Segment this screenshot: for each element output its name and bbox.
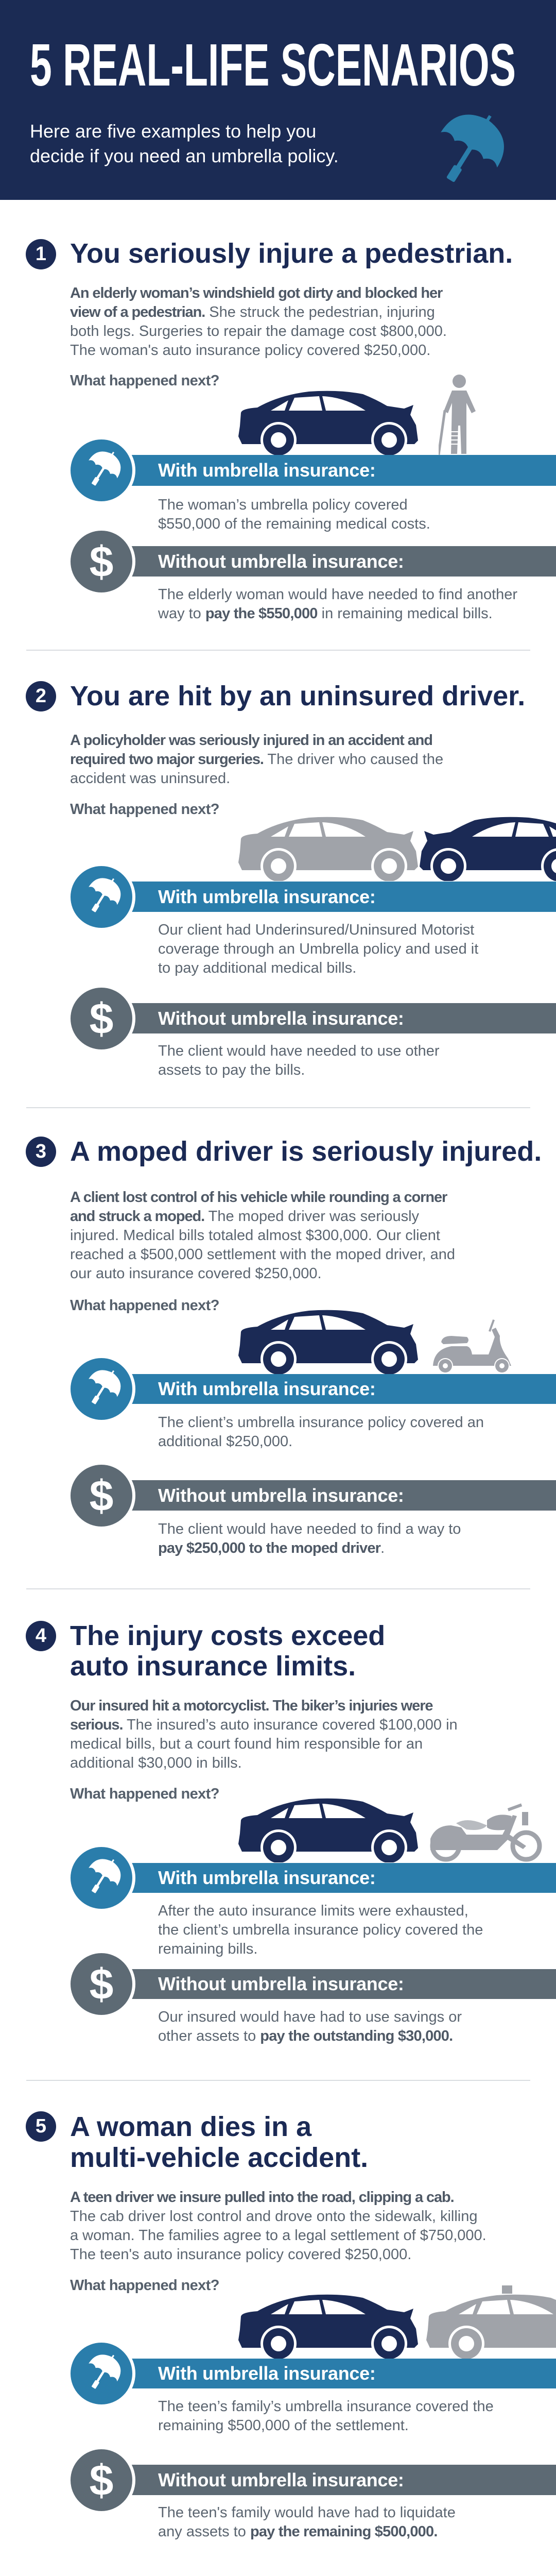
- with umbrella 2: [71, 866, 556, 928]
- without umbrella 5: [71, 2449, 556, 2511]
- with umbrella 4: [71, 1847, 556, 1909]
- what happened 2: What happened next?: [70, 801, 219, 818]
- icon: dollar: [67, 2446, 135, 2514]
- with umbrella 4: With umbrella insurance:: [158, 1867, 376, 1888]
- icon: dollar: [67, 1462, 135, 1530]
- heading 4: The injury costs exceed: [70, 1620, 385, 1651]
- body 5: [70, 2189, 486, 2263]
- number 3: [26, 1137, 56, 1167]
- without umbrella 3: [71, 1465, 556, 1527]
- number 5: 5: [36, 2115, 46, 2137]
- without umbrella 4: Without umbrella insurance:: [158, 1973, 404, 1994]
- body 4: additional $30,000 in bills.: [70, 1755, 242, 1771]
- icon: taxi: [426, 2285, 556, 2359]
- icon: scooter: [433, 1319, 511, 1372]
- answer without 1: [158, 586, 517, 622]
- heading 1: You seriously injure a pedestrian.: [70, 238, 513, 269]
- subtitle: decide if you need an umbrella policy.: [30, 145, 339, 166]
- without umbrella 5: Without umbrella insurance:: [158, 2469, 404, 2490]
- heading 5: multi-vehicle accident.: [70, 2142, 368, 2173]
- icon: navy car 2: [420, 817, 556, 881]
- body 4: medical bills, but a court found him responsible for an: [70, 1736, 423, 1752]
- with umbrella 5: [71, 2343, 556, 2404]
- answer with 2: to pay additional medical bills.: [158, 960, 356, 976]
- number 4: 4: [36, 1625, 46, 1647]
- answer without 5: any assets to pay the remaining $500,000.: [158, 2523, 438, 2540]
- heading 4: [70, 1620, 385, 1682]
- icon: car 3: [238, 1310, 418, 1374]
- body 4: Our insured hit a motorcyclist. The biker’s injuries were: [70, 1698, 432, 1714]
- answer without 3: The client would have needed to find a way to: [158, 1521, 461, 1537]
- icon: car 5: [238, 2295, 418, 2359]
- answer without 4: [158, 2009, 462, 2044]
- number 1: 1: [36, 243, 46, 265]
- answer without 3: [158, 1521, 461, 1556]
- answer with 3: The client’s umbrella insurance policy covered an: [158, 1414, 484, 1431]
- body 2: accident was uninsured.: [70, 770, 230, 787]
- icon: dollar: [67, 528, 135, 596]
- answer with 3: additional $250,000.: [158, 1433, 292, 1450]
- with umbrella 3: With umbrella insurance:: [158, 1378, 376, 1399]
- without umbrella 1: Without umbrella insurance:: [158, 550, 404, 572]
- icon: umbrella: [67, 2340, 135, 2408]
- subtitle: [30, 121, 339, 166]
- number 5: [26, 2111, 56, 2142]
- body 2: A policyholder was seriously injured in an accident and: [70, 732, 432, 749]
- icon: header umbrella: [441, 114, 504, 182]
- with umbrella 1: With umbrella insurance:: [158, 460, 376, 481]
- body 3: A client lost control of his vehicle while rounding a corner: [70, 1189, 447, 1206]
- answer with 4: [158, 1903, 483, 1957]
- with umbrella 1: [71, 439, 556, 501]
- without umbrella 3: Without umbrella insurance:: [158, 1485, 404, 1505]
- icon: motorcycle: [430, 1803, 542, 1862]
- answer with 2: Our client had Underinsured/Uninsured Motorist: [158, 922, 474, 938]
- body 5: The teen's auto insurance policy covered $250,000.: [70, 2246, 411, 2263]
- icon: dollar: [67, 1950, 135, 2018]
- heading 3: A moped driver is seriously injured.: [70, 1136, 542, 1167]
- icon: dollar: $: [90, 1471, 113, 1520]
- icon: car 4: [238, 1798, 418, 1862]
- answer with 5: The teen’s family’s umbrella insurance covered the: [158, 2398, 494, 2415]
- body 5: A teen driver we insure pulled into the road, clipping a cab.: [70, 2189, 454, 2206]
- with umbrella 3: [71, 1358, 556, 1420]
- without umbrella 4: [71, 1953, 556, 2015]
- body 2: [70, 732, 443, 787]
- what happened 3: What happened next?: [70, 1297, 219, 1314]
- icon: gray car 2: [238, 817, 418, 881]
- body 3: injured. Medical bills totaled almost $300,000. Our client: [70, 1227, 440, 1244]
- icon: dollar: $: [90, 1960, 113, 2008]
- body 1: The woman's auto insurance policy covered $250,000.: [70, 342, 430, 359]
- without umbrella 1: [71, 531, 556, 592]
- what happened 1: What happened next?: [70, 372, 219, 389]
- answer without 2: [158, 1043, 440, 1078]
- number 1: [26, 239, 56, 269]
- answer with 2: coverage through an Umbrella policy and used it: [158, 941, 478, 957]
- body 1: view of a pedestrian. She struck the pedestrian, injuring: [70, 304, 435, 320]
- answer without 3: pay $250,000 to the moped driver.: [158, 1540, 385, 1556]
- number 3: 3: [36, 1141, 46, 1162]
- answer with 3: [158, 1414, 484, 1450]
- icon: umbrella: [67, 436, 135, 504]
- body 1: [70, 285, 447, 359]
- answer without 2: The client would have needed to use other: [158, 1043, 440, 1059]
- without umbrella 2: Without umbrella insurance:: [158, 1008, 404, 1028]
- answer with 5: remaining $500,000 of the settlement.: [158, 2417, 409, 2434]
- body 1: An elderly woman’s windshield got dirty and blocked her: [70, 285, 442, 301]
- icon: dollar: $: [90, 994, 113, 1043]
- icon: umbrella: [67, 1844, 135, 1912]
- icon: umbrella: [67, 1355, 135, 1423]
- answer with 2: [158, 922, 479, 976]
- icon: car 1: [238, 391, 418, 455]
- answer without 5: [158, 2504, 456, 2540]
- body 5: a woman. The families agree to a legal settlement of $750,000.: [70, 2227, 486, 2244]
- number 2: 2: [36, 685, 46, 707]
- heading 2: You are hit by an uninsured driver.: [70, 681, 525, 711]
- answer without 5: The teen's family would have had to liquidate: [158, 2504, 456, 2521]
- body 4: serious. The insured’s auto insurance covered $100,000 in: [70, 1717, 458, 1733]
- answer with 1: [158, 497, 430, 532]
- subtitle: Here are five examples to help you: [30, 121, 316, 142]
- answer without 4: other assets to pay the outstanding $30,000.: [158, 2028, 453, 2044]
- body 4: [70, 1698, 458, 1771]
- number 4: [26, 1621, 56, 1651]
- answer with 4: remaining bills.: [158, 1941, 257, 1957]
- answer without 4: Our insured would have had to use savings or: [158, 2009, 462, 2025]
- heading 5: [70, 2111, 368, 2173]
- answer with 4: After the auto insurance limits were exhausted,: [158, 1903, 468, 1919]
- body 1: both legs. Surgeries to repair the damage cost $800,000.: [70, 323, 447, 340]
- body 3: our auto insurance covered $250,000.: [70, 1265, 322, 1282]
- without umbrella 2: [71, 988, 556, 1049]
- body 3: and struck a moped. The moped driver was seriously: [70, 1208, 419, 1225]
- answer without 2: assets to pay the bills.: [158, 1062, 305, 1078]
- header banner: [0, 0, 556, 200]
- answer with 4: the client’s umbrella insurance policy covered the: [158, 1922, 483, 1938]
- icon: injured pedestrian: [439, 375, 476, 455]
- body 5: The cab driver lost control and drove onto the sidewalk, killing: [70, 2208, 477, 2225]
- answer with 1: The woman’s umbrella policy covered: [158, 497, 408, 513]
- body 3: reached a $500,000 settlement with the moped driver, and: [70, 1246, 455, 1263]
- what happened 4: What happened next?: [70, 1786, 219, 1802]
- heading 4: auto insurance limits.: [70, 1651, 356, 1682]
- icon: umbrella: [67, 863, 135, 931]
- body 2: required two major surgeries. The driver who caused the: [70, 751, 443, 768]
- number 2: [26, 681, 56, 711]
- what happened 5: What happened next?: [70, 2277, 219, 2294]
- with umbrella 2: With umbrella insurance:: [158, 886, 376, 907]
- icon: dollar: $: [90, 537, 113, 586]
- with umbrella 5: With umbrella insurance:: [158, 2363, 376, 2384]
- answer with 5: [158, 2398, 494, 2434]
- heading 5: A woman dies in a: [70, 2111, 311, 2142]
- body 3: [70, 1189, 455, 1282]
- icon: dollar: $: [90, 2456, 113, 2504]
- answer without 1: The elderly woman would have needed to find another: [158, 586, 517, 603]
- icon: dollar: [67, 985, 135, 1053]
- answer with 1: $550,000 of the remaining medical costs.: [158, 516, 430, 532]
- answer without 1: way to pay the $550,000 in remaining medical bills.: [158, 605, 493, 622]
